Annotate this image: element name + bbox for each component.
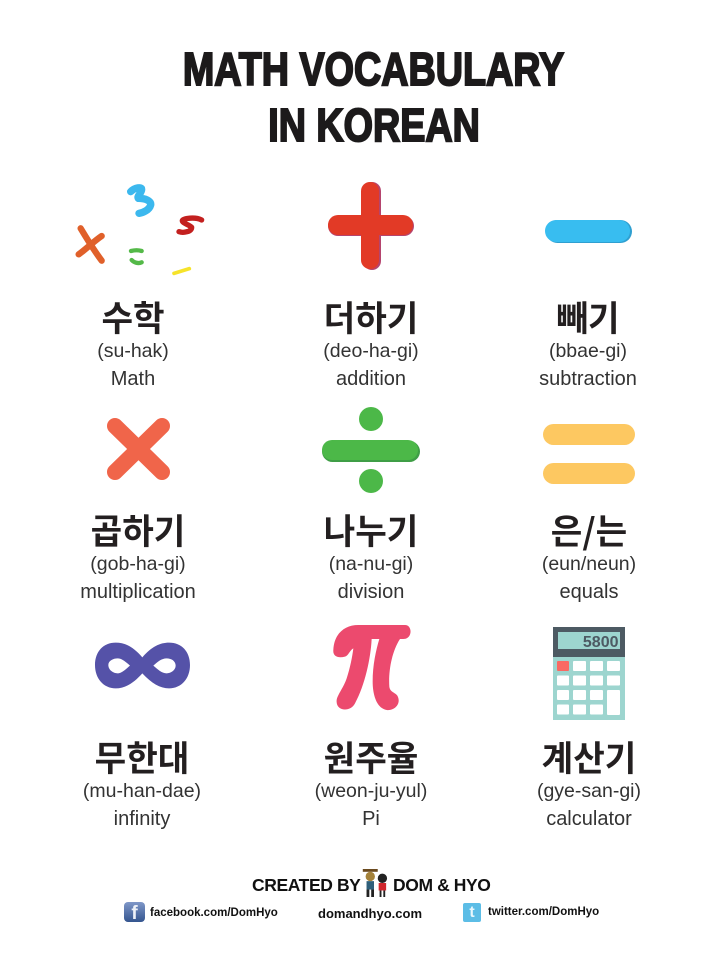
vocabulary: multiplication: 곱하기 [91,504,185,555]
vocabulary: subtraction [539,291,637,390]
icon: minus [545,220,632,243]
icon: multiply [107,418,170,480]
vocabulary: addition: 더하기 [324,291,418,342]
vocabulary: pi: Pi [362,808,380,830]
vocabulary: equals: equals [560,581,618,603]
website: domandhyo.com [318,906,422,921]
icon: dom and hyo characters [362,869,388,897]
title: IN KOREAN [268,99,480,151]
vocabulary: subtraction: 빼기 [556,291,620,342]
vocabulary: infinity [83,731,201,830]
vocabulary: addition [323,291,419,390]
icon: calculator [553,627,625,720]
vocabulary: pi [315,731,427,830]
vocabulary: infinity: (mu-han-dae) [83,780,201,802]
vocabulary: subtraction: subtraction [539,368,637,390]
icon: divide [322,407,420,493]
title [183,43,565,151]
vocabulary: division: division [338,581,404,603]
vocabulary: equals: (eun/neun) [542,553,636,575]
icon: plus [328,182,414,270]
vocabulary: calculator: (gye-san-gi) [537,780,641,802]
icon: equals [543,424,635,484]
icon: twitter: t [469,904,475,921]
title: MATH VOCABULARY [183,43,565,95]
vocabulary: infinity: 무한대 [95,731,189,782]
vocabulary: math: (su-hak) [97,340,169,362]
icon: pi [333,625,411,710]
icon: calculator: 5800 [583,634,619,651]
vocabulary: multiplication: (gob-ha-gi) [90,553,186,575]
vocabulary: calculator: calculator [546,808,632,830]
icon: facebook [124,902,145,922]
icon: infinity [95,642,190,688]
footer credit [252,869,491,897]
footer credit: DOM & HYO [393,875,491,895]
vocabulary: infinity: infinity [114,808,170,830]
vocabulary: multiplication [80,504,196,603]
vocabulary: calculator [537,731,641,830]
vocabulary: division: 나누기 [324,504,418,555]
icon: math numbers [76,184,204,276]
vocabulary: math: Math [111,368,155,390]
vocabulary: division [324,504,418,603]
vocabulary: pi: (weon-ju-yul) [315,780,427,802]
vocabulary: addition: addition [336,368,406,390]
facebook link: facebook.com/DomHyo [150,907,278,919]
vocabulary: subtraction: (bbae-gi) [549,340,627,362]
vocabulary: calculator: 계산기 [542,731,636,782]
twitter link: twitter.com/DomHyo [488,906,599,918]
vocabulary: pi: 원주율 [324,731,418,782]
vocabulary: division: (na-nu-gi) [329,553,413,575]
vocabulary: math [97,291,169,390]
vocabulary: addition: (deo-ha-gi) [323,340,419,362]
vocabulary: equals [542,504,636,603]
vocabulary: multiplication: multiplication [80,581,196,603]
icon: twitter [463,903,481,922]
vocabulary: math: 수학 [101,291,165,342]
footer credit: CREATED BY [252,875,360,895]
vocabulary: equals: 은/는 [551,504,627,555]
